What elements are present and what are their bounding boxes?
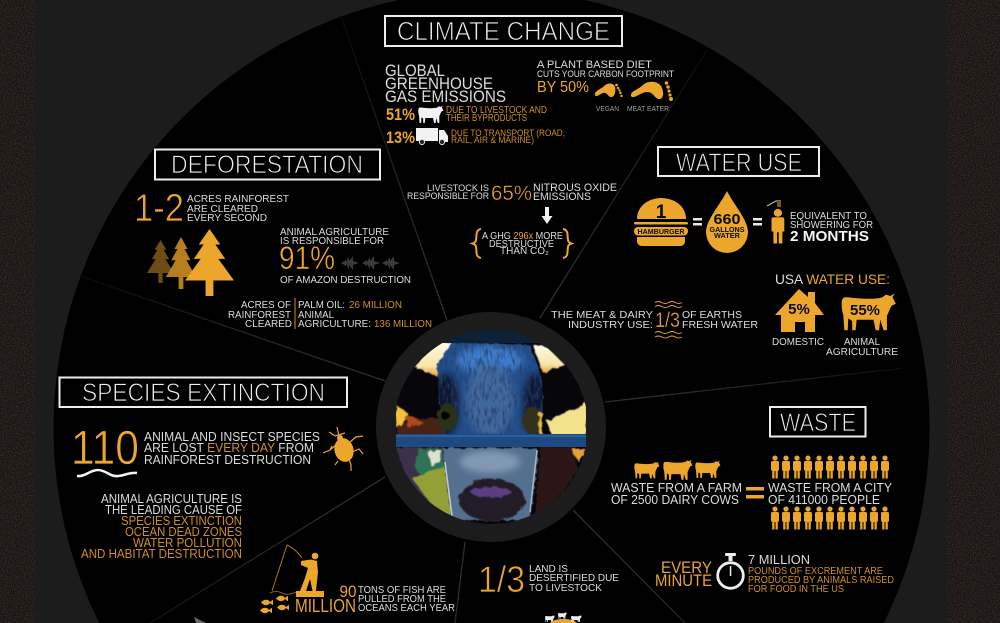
panel: species extinction [60,378,455,623]
text: leading cause [81,492,242,561]
stat: 1-2 acres: ACRES RAINFOREST [187,193,290,205]
stat: 13 percent transport [386,128,565,147]
stat: 90 million tons of fish: MILLION [295,596,356,616]
text: 7 million pounds: POUNDS OF EXCREMENT ARE [748,566,883,577]
text: waste from city: OF 411000 PEOPLE [768,493,880,507]
stat: one third of land: 1/3 [478,559,525,600]
callout: ghg 296x: DESTRUCTIVE [489,239,554,250]
table: acres of rainforest cleared: ACRES OF [241,299,291,311]
text: leading cause: SPECIES EXTINCTION [121,514,242,528]
table: acres of rainforest cleared: 136 MILLION [374,318,432,330]
text: every minute [655,559,712,590]
heading: species extinction: SPECIES EXTINCTION [82,379,325,407]
icon labels: vegan and meat eater: VEGAN [596,106,619,113]
stat: 110 species [71,422,320,476]
icon: hamburger: HAMBURGER [638,227,685,236]
text: waste from farm: WASTE FROM A FARM [611,481,742,495]
stat: one third of land: LAND IS [529,563,568,575]
callout: ghg 296x [472,229,572,258]
stat: 91 percent amazon [279,226,411,286]
text: showering for 2 months: SHOWERING FOR [790,220,873,231]
stat: 51 percent livestock: DUE TO LIVESTOCK AND [446,105,547,116]
stat: 90 million tons of fish: OCEANS EACH YEAR [358,603,455,614]
text: 7 million pounds: FOR FOOD IN THE US [748,584,844,595]
text: plant based diet: BY 50% [537,79,589,96]
icon: vegan footprint [595,83,623,97]
text: leading cause: THE LEADING CAUSE OF [105,503,242,517]
icon: hamburger: 1 [656,202,667,223]
callout: ghg 296x: A GHG 296x MORE [482,231,563,242]
icon: people top row [771,456,889,478]
text: leading cause: AND HABITAT DESTRUCTION [81,547,242,561]
stat: 91 percent amazon: 91% [279,240,335,276]
text: one third of fresh water: OF EARTHS [682,309,742,321]
text: one third of fresh water: FRESH WATER [682,319,758,331]
stat: 1-2 acres: EVERY SECOND [187,212,267,224]
text: leading cause: WATER POLLUTION [133,536,242,550]
stat: 91 percent amazon: IS RESPONSIBLE FOR [280,235,384,247]
labels: domestic and animal agriculture: AGRICULTURE [826,346,898,358]
text: leading cause: ANIMAL AGRICULTURE IS [101,492,242,506]
text: waste from farm [611,481,742,507]
text: waste from farm: OF 2500 DAIRY COWS [611,493,739,507]
icon: trees [147,229,234,296]
text: showering for 2 months: 2 MONTHS [790,228,869,245]
icon: cow 55 percent: 55% [850,302,880,319]
icon: water drop 660 gallons: GALLONS [710,227,745,234]
arrow: down [542,207,552,224]
equals sign [753,218,762,226]
icon: house 5 percent [775,289,824,332]
icon: stopwatch [718,553,743,588]
table: acres of rainforest cleared: CLEARED [245,318,292,330]
center portrait: cow behind fence [396,330,586,524]
icon: cattle on globe [545,612,582,623]
equals sign [693,218,702,226]
text: global greenhouse gas emissions: GREENHOUSE [385,75,493,93]
heading: waste: WASTE [780,409,856,437]
text: nitrous oxide: LIVESTOCK IS [427,183,489,194]
labels: domestic and animal agriculture [772,336,898,358]
stat: 51 percent livestock: 51% [386,105,415,124]
text: plant based diet: A PLANT BASED DIET [537,59,652,71]
text: nitrous oxide: RESPONSIBLE FOR [407,191,489,202]
icon: cow 55 percent [842,293,896,330]
labels: domestic and animal agriculture: ANIMAL [844,336,880,348]
table: acres of rainforest cleared: RAINFOREST [228,309,292,321]
table: acres of rainforest cleared: PALM OIL: [298,299,345,311]
callout: ghg 296x: THAN CO₂ [500,246,549,257]
icon: water drop 660 gallons: WATER [714,233,740,240]
stat: 1-2 acres: 1-2 [134,187,184,230]
table: acres of rainforest cleared: AGRICULTURE: [298,318,371,330]
text: nitrous oxide: 65% [491,182,532,205]
panel: waste [611,407,894,595]
stat: 13 percent transport: 13% [386,128,415,147]
stat: one third of land: TO LIVESTOCK [529,582,602,594]
text: showering for 2 months: EQUIVALENT TO [790,211,867,222]
text: 7 million pounds [748,552,894,595]
stat: 90 million tons of fish: TONS OF FISH ARE [358,585,446,596]
text: one third of fresh water: INDUSTRY USE: [568,319,653,331]
text: nitrous oxide: EMISSIONS [533,191,591,203]
panel: water use [551,147,898,358]
text: nitrous oxide [407,182,617,205]
icon: house 5 percent: 5% [788,301,810,318]
heading: water use: WATER USE [676,149,802,177]
icon labels: vegan and meat eater [596,106,669,113]
text: one third of fresh water: 1/3 [655,309,680,332]
text: global greenhouse gas emissions: GLOBAL [385,62,445,80]
panel: land [478,559,619,623]
stat: one third of land: DESERTIFIED DUE [529,572,619,584]
icon: water drop 660 gallons [706,191,748,253]
icon: people bottom row [771,506,889,530]
icon: cropped arrow tip [194,617,206,623]
text: 7 million pounds: 7 MILLION [748,552,810,567]
text: plant based diet: CUTS YOUR CARBON FOOTPRINT [537,69,674,79]
text: leading cause: OCEAN DEAD ZONES [125,525,242,539]
text: plant based diet [537,59,674,96]
stat: 90 million tons of fish: 90 [340,582,356,601]
heading: climate change: CLIMATE CHANGE [397,16,610,46]
stat: 1-2 acres: ARE CLEARED [187,203,258,215]
stat: 110 species: RAINFOREST DESTRUCTION [144,453,311,467]
text: one third of fresh water: THE MEAT & DAIRY [551,309,653,321]
text: waste from city: WASTE FROM A CITY [768,481,893,495]
text: waste from city [768,481,893,507]
stat: 91 percent amazon: OF AMAZON DESTRUCTION [280,274,411,286]
stat: 110 species: ARE LOST EVERY DAY FROM [144,441,314,455]
stat: 13 percent transport: RAIL, AIR & MARINE) [451,135,534,146]
table: acres of rainforest cleared: ANIMAL [298,309,334,321]
icon: insect [323,427,363,471]
text: global greenhouse gas emissions [385,62,506,106]
icon: three cows [634,460,720,480]
icon: meat eater footprint [631,81,673,101]
icon: hamburger [634,198,688,246]
icon: water drop 660 gallons: 660 [714,211,740,228]
icon: person showering [767,201,784,244]
table: acres of rainforest cleared [228,298,432,330]
stat: 110 species: 110 [71,422,139,475]
text: nitrous oxide: NITROUS OXIDE [533,182,617,194]
stat: 51 percent livestock: THEIR BYPRODUCTS [446,113,527,124]
stat: 90 million tons of fish: PULLED FROM THE [358,594,446,605]
heading: deforestation: DEFORESTATION [171,151,363,179]
stat: 91 percent amazon: ANIMAL AGRICULTURE [280,226,389,238]
table: acres of rainforest cleared: 26 MILLION [349,299,402,311]
panel: deforestation [134,150,432,330]
icon labels: vegan and meat eater: MEAT EATER [627,106,669,113]
text: showering for 2 months [790,211,873,245]
text: 7 million pounds: PRODUCED BY ANIMALS RAISED [748,575,894,586]
equals sign [746,487,764,498]
text: every minute: EVERY [661,559,712,577]
stat: one third of land [478,559,619,600]
icon: fisherman [260,545,324,613]
panel: climate change [385,16,674,258]
stat: 90 million tons of fish [295,582,455,616]
stat: 1-2 acres [134,187,290,230]
stat: 51 percent livestock [386,105,547,124]
center portrait ring [376,312,606,542]
stat: 13 percent transport: DUE TO TRANSPORT (ROAD, [451,128,565,139]
text: global greenhouse gas emissions: GAS EMISSIONS [385,88,506,106]
text: usa water use: USA WATER USE: [775,271,890,287]
text: every minute: MINUTE [655,572,712,590]
stat: 110 species: ANIMAL AND INSECT SPECIES [144,430,320,444]
text: one third of fresh water [551,302,758,338]
labels: domestic and animal agriculture: DOMESTIC [772,336,824,348]
